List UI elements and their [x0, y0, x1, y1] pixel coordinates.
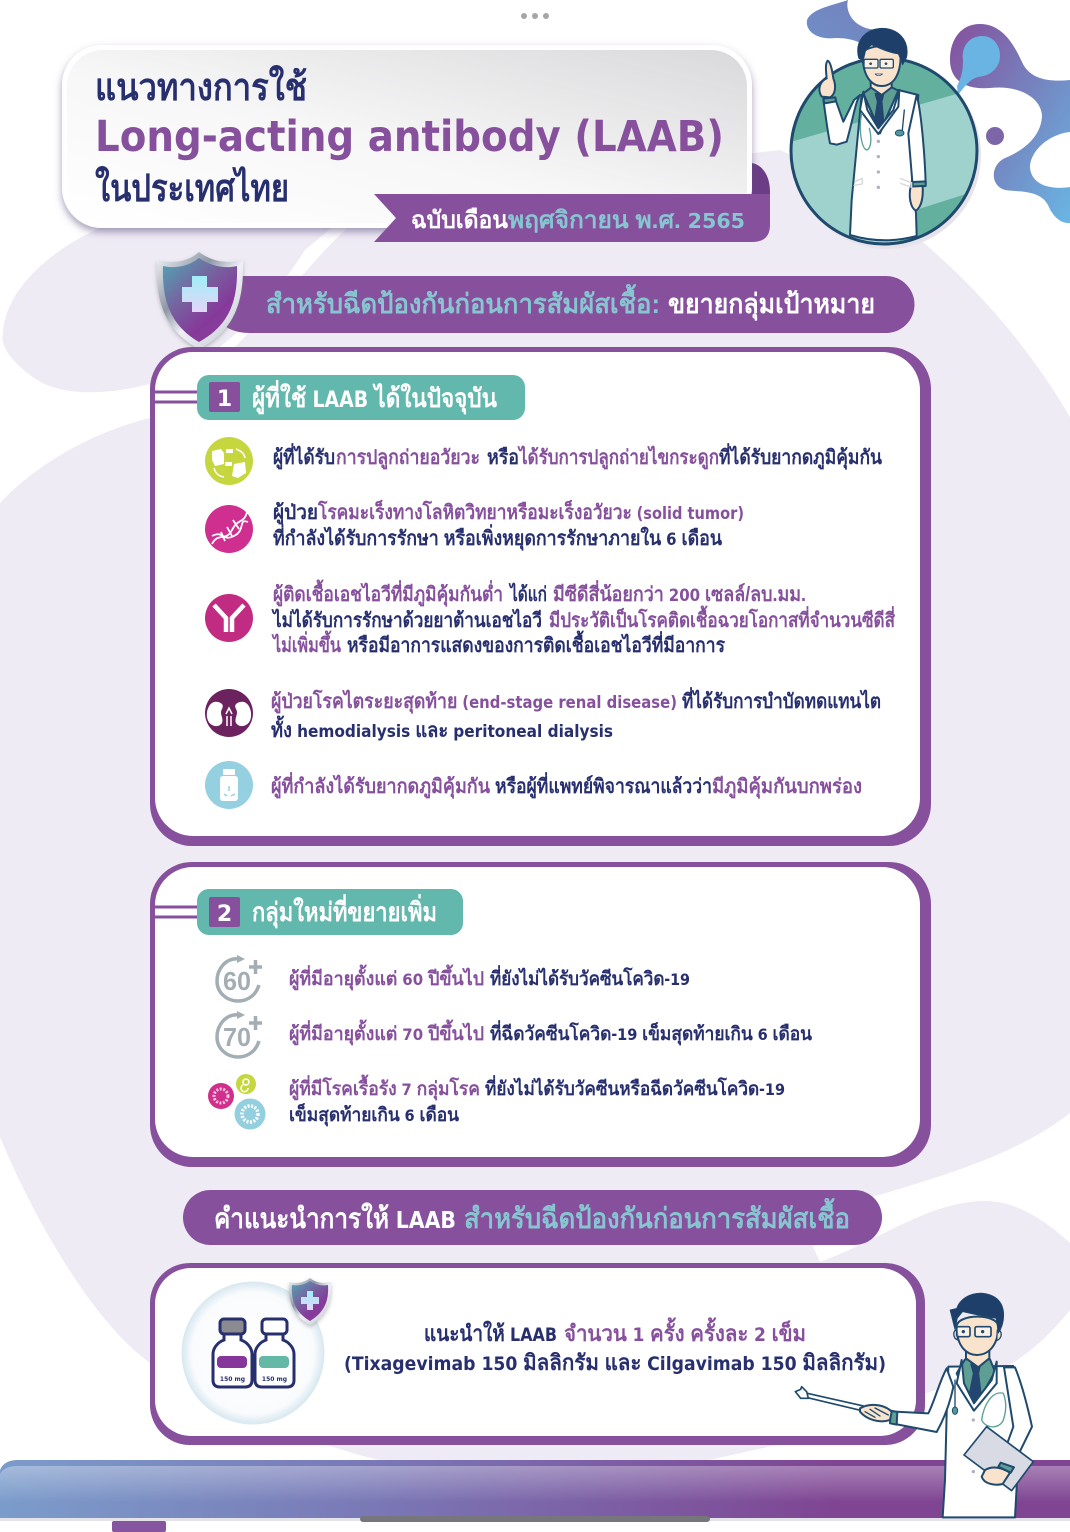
text: immunosuppressed: ผู้ที่กำลังได้รับยากดภูมิคุ้มกัน [271, 771, 490, 800]
text: kidney disease: ผู้ป่วยโรคไตระยะสุดท้าย (end-stage renal disease) [271, 689, 677, 715]
text: immunosuppressed: หรือผู้ที่แพทย์พิจารณาแล้วว่า [495, 771, 712, 800]
text: cancer [273, 499, 744, 551]
text: chronic disease: ผู้ที่มีโรคเรื้อรัง 7 กลุ่มโรค [289, 1074, 480, 1101]
text: immunosuppressed: มีภูมิคุ้มกันบกพร่อง [712, 775, 862, 800]
ribbon fold [745, 163, 770, 200]
heading pill 2 [197, 889, 463, 935]
text: transplant [273, 442, 882, 471]
vial 2 [255, 1319, 294, 1387]
header card [62, 45, 770, 228]
section banner: recommendation: คำแนะนำการให้ LAAB [214, 1202, 456, 1234]
icon: age 70+ [217, 1011, 262, 1057]
doctor in circle illustration [780, 28, 985, 250]
text: transplant: ได้รับการปลูกถ่ายไขกระดูก [517, 445, 719, 471]
text: cancer: ผู้ป่วย [273, 501, 318, 526]
text: recommended dose: (Tixagevimab 150 มิลลิกรัม และ Cilgavimab 150 มิลลิกรัม) [344, 1350, 886, 1375]
text: age 70: ผู้ที่มีอายุตั้งแต่ 70 ปีขึ้นไป [289, 1019, 484, 1046]
panel 2: newly expanded group [150, 862, 931, 1167]
text: chronic disease: เข็มสุดท้ายเกิน 6 เดือน [289, 1102, 459, 1127]
text: recommended dose: จำนวน 1 ครั้ง ครั้งละ 2 เข็ม [564, 1317, 806, 1346]
text: kidney disease: ที่ได้รับการบำบัดทดแทนไต [682, 686, 881, 713]
icon: small shield [289, 1278, 331, 1325]
icon: bubble with vials [182, 1278, 331, 1424]
icon: organ transplant [205, 437, 253, 485]
section banner: recommendation [183, 1190, 882, 1245]
text: age 70: ที่ฉีดวัคซีนโควิด-19 เข็มสุดท้ายเกิน 6 เดือน [490, 1020, 812, 1046]
section banner: pre-exposure prophylaxis [215, 276, 914, 333]
text: recommended dose [344, 1317, 886, 1375]
decorative blobs top right [807, 0, 1070, 223]
text: immunosuppressed [271, 771, 862, 800]
text: transplant: หรือ [487, 446, 519, 469]
panel 3: dosage [150, 1263, 925, 1445]
doctor with pointer illustration [795, 1293, 1033, 1517]
text: HIV: ผู้ติดเชื้อเอชไอวีที่มีภูมิคุ้มกันต่ำ [273, 579, 503, 608]
pointer [795, 1387, 863, 1411]
heading pill 1: ผู้ที่ใช้ LAAB ได้ในปัจจุบัน [252, 379, 497, 415]
bottom bar [0, 1460, 1070, 1532]
icon: kidneys [205, 689, 253, 737]
icon: dna [205, 505, 253, 553]
title line 2: Long-acting antibody (LAAB) [95, 112, 724, 162]
section banner: pre-exposure prophylaxis: ขยายกลุ่มเป้าหมาย [668, 289, 875, 321]
top pagination dots [521, 13, 549, 19]
text: chronic disease: ที่ยังไม่ได้รับวัคซีนหรือฉีดวัคซีนโควิด-19 [485, 1075, 785, 1100]
text: age 60: ผู้ที่มีอายุตั้งแต่ 60 ปีขึ้นไป [289, 964, 484, 991]
vial 1 [213, 1319, 252, 1387]
icon: shield [157, 252, 243, 349]
card body [62, 45, 752, 228]
text: age 60 [289, 964, 690, 991]
connector lines [155, 392, 200, 402]
text: HIV: มีประวัติเป็นโรคติดเชื้อฉวยโอกาสที่จำนวนซีดีสี่ [549, 605, 896, 632]
text: HIV: ไม่เพิ่มขึ้น [271, 630, 341, 657]
section banner: recommendation: สำหรับฉีดป้องกันก่อนการสัมผัสเชื้อ [464, 1197, 850, 1234]
icon: chronic disease circles [208, 1074, 266, 1130]
section banner: pre-exposure prophylaxis: สำหรับฉีดป้องกันก่อนการสัมผัสเชื้อ: [266, 283, 660, 319]
text: HIV: มีซีดีสี่น้อยกว่า 200 เซลล์/ลบ.มม. [553, 579, 806, 606]
panel 1: current LAAB users [150, 347, 931, 846]
heading pill 1: 1 [217, 387, 232, 412]
heading pill 2: กลุ่มใหม่ที่ขยายเพิ่ม [252, 893, 437, 929]
heading pill 2: 2 [217, 902, 232, 927]
text: recommended dose: แนะนำให้ LAAB [424, 1320, 557, 1346]
edition ribbon [374, 194, 770, 242]
vial 1: 150 mg [220, 1376, 245, 1383]
title line 1: แนวทางการใช้ [95, 65, 307, 109]
icon: age 70+: 70 [223, 1022, 251, 1052]
vial 2: 150 mg [262, 1376, 287, 1383]
text: cancer: ที่กำลังได้รับการรักษา หรือเพิ่งหยุดการรักษาภายใน 6 เดือน [273, 523, 722, 551]
icon: age 60+ [217, 955, 262, 1001]
text: cancer: โรคมะเร็งทางโลหิตวิทยาหรือมะเร็งอวัยวะ (solid tumor) [317, 499, 744, 524]
text: chronic disease [289, 1074, 785, 1127]
text: HIV: ได้แก่ [508, 582, 547, 606]
text: age 70 [289, 1019, 812, 1046]
text: age 60: ที่ยังไม่ได้รับวัคซีนโควิด-19 [490, 965, 690, 990]
text: HIV: ไม่ได้รับการรักษาด้วยยาต้านเอชไอวี [271, 608, 542, 632]
heading pill 1 [197, 375, 525, 420]
edition ribbon: ฉบับเดือน [411, 207, 509, 234]
text: transplant: การปลูกถ่ายอวัยวะ [336, 447, 480, 471]
icon: age 60+: 60 [223, 966, 251, 996]
text: transplant: ที่ได้รับยากดภูมิคุ้มกัน [719, 442, 882, 471]
icon: antibody [205, 594, 253, 642]
text: kidney disease [271, 686, 881, 742]
text: transplant: ผู้ที่ได้รับ [273, 442, 335, 471]
icon: medicine bottle [205, 761, 253, 809]
title line 3: ในประเทศไทย [95, 166, 289, 210]
text: kidney disease: ทั้ง hemodialysis และ peritoneal dialysis [271, 715, 613, 742]
text: HIV [271, 579, 896, 657]
text: HIV: หรือมีอาการแสดงของการติดเชื้อเอชไอวีที่มีอาการ [347, 630, 725, 657]
edition ribbon: พฤศจิกายน พ.ศ. 2565 [508, 207, 745, 234]
